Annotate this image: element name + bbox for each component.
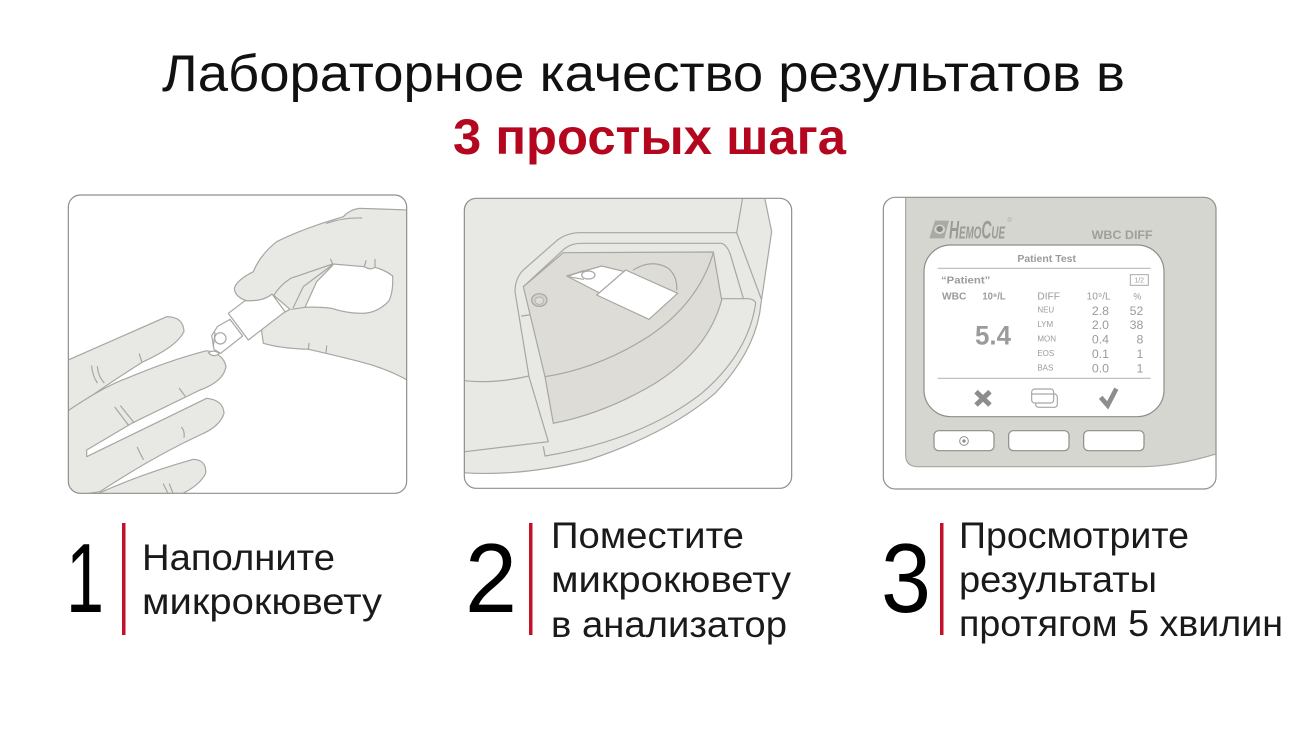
step 3 caption: результаты	[959, 559, 1157, 600]
differential table: 2.8	[1092, 304, 1109, 318]
differential table: DIFF	[1037, 291, 1060, 302]
WBC value: 5.4	[975, 321, 1011, 351]
step 1 caption: 1	[66, 523, 104, 633]
icon: check	[1101, 389, 1116, 405]
WBC value: WBC	[942, 291, 966, 302]
step 2 caption	[465, 515, 792, 645]
brand logo: HEMOCUE	[949, 217, 1005, 244]
step 2 caption: Поместите	[551, 515, 744, 556]
icon: cards	[1032, 389, 1057, 407]
screen: 1/2	[1134, 277, 1144, 284]
patient row: “Patient”	[941, 276, 990, 287]
model label: WBC DIFF	[1092, 228, 1153, 242]
step 3 caption	[881, 515, 1283, 644]
step 3 caption: 3	[881, 523, 931, 633]
brand logo: ®	[1007, 217, 1012, 224]
differential table: EOS	[1037, 349, 1054, 358]
differential table: LYM	[1037, 320, 1053, 329]
screen heading: Patient Test	[1017, 254, 1077, 265]
analyzer body	[462, 197, 772, 473]
icon: microcuvette	[212, 294, 285, 353]
step 2 caption: 2	[465, 523, 517, 633]
step 3 caption: протягом 5 хвилин	[959, 603, 1283, 644]
device body	[906, 195, 1218, 467]
title: Лабораторное качество результатов в	[162, 45, 1125, 103]
differential table: 0.1	[1092, 347, 1109, 361]
title	[162, 45, 1125, 165]
step 2 caption: в анализатор	[551, 604, 787, 645]
differential table: 2.0	[1092, 318, 1109, 332]
step 3 caption: Просмотрите	[959, 515, 1189, 556]
step 1 caption: Наполните	[142, 537, 335, 578]
panel: step 1 illustration, hands filling microcuvette	[67, 195, 408, 497]
device buttons	[934, 431, 1144, 451]
differential table: %	[1133, 291, 1141, 301]
cuvette holder	[523, 252, 722, 423]
WBC value: 10⁹/L	[982, 291, 1006, 302]
panel: step 2 illustration, analyzer with cuvette holder	[462, 197, 792, 488]
step 1 caption	[66, 523, 383, 635]
differential table: NEU	[1037, 306, 1054, 315]
differential table: BAS	[1037, 364, 1053, 373]
panel: step 3 illustration, analyzer screen with results	[883, 195, 1218, 489]
screen	[924, 245, 1164, 417]
icon: right hand	[234, 208, 408, 381]
step 1 caption: микрокювету	[142, 581, 383, 622]
differential table: 0.4	[1092, 333, 1109, 347]
differential table: 1	[1136, 362, 1143, 376]
WBC value	[942, 291, 1011, 351]
differential table: 52	[1130, 304, 1143, 318]
differential table	[1037, 291, 1143, 376]
differential table: 8	[1136, 333, 1143, 347]
icon: cross	[976, 392, 990, 405]
step 2 caption: микрокювету	[551, 559, 792, 600]
differential table: 10⁹/L	[1087, 291, 1111, 302]
differential table: MON	[1037, 334, 1056, 343]
differential table: 0.0	[1092, 362, 1109, 376]
title highlight: 3 простых шага	[453, 109, 847, 165]
differential table: 1	[1136, 347, 1143, 361]
icon: left hand	[67, 317, 226, 497]
differential table: 38	[1130, 318, 1143, 332]
icon: microcuvette in holder	[567, 266, 678, 319]
